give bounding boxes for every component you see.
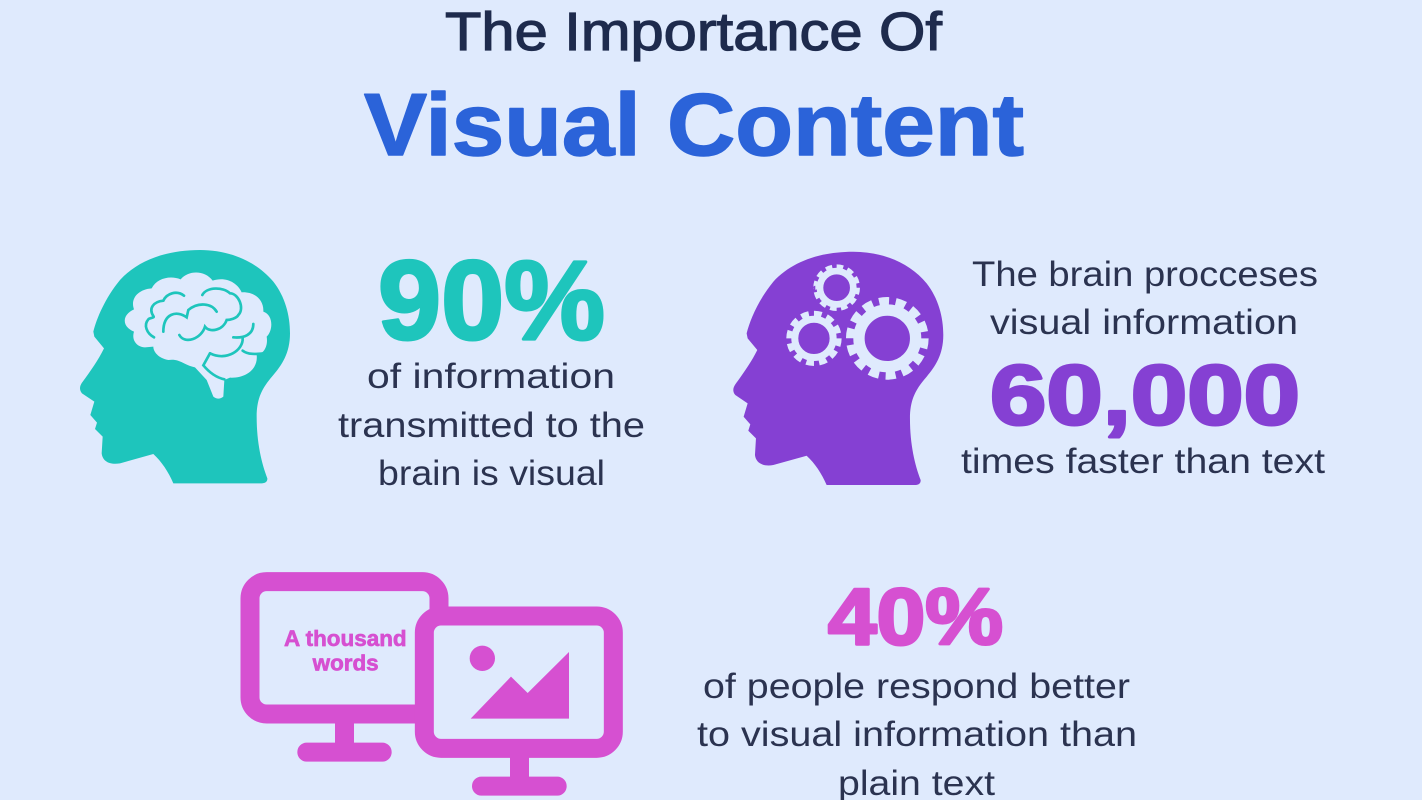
brain: [125, 272, 271, 399]
stat: 60,000: [961, 255, 1325, 481]
image glyph: [470, 646, 569, 719]
big number 60,000: 60,000: [990, 348, 1300, 442]
description line 3: brain is visual: [378, 454, 605, 493]
big number 40%: 40%: [828, 572, 1003, 661]
description line 1: of information: [367, 357, 615, 396]
right monitor: [424, 616, 613, 796]
title line 2: Visual Content: [364, 75, 1024, 174]
text line 2: visual information: [990, 303, 1298, 342]
left monitor label: A thousand: [284, 626, 407, 651]
stat: 40%: [697, 572, 1137, 800]
left monitor label line 2: words: [312, 650, 379, 675]
title: [364, 2, 1024, 174]
stat: 90%: [338, 238, 645, 493]
gears: [789, 266, 925, 376]
description line 2: transmitted to the: [338, 406, 645, 445]
title line 1: The Importance Of: [445, 2, 943, 62]
description line 2: to visual information than: [697, 715, 1137, 754]
description line 1: of people respond better: [703, 667, 1130, 706]
icon: teal head with brain: [80, 250, 290, 483]
text line 1: The brain procceses: [972, 255, 1318, 294]
icon: purple head with gears: [733, 252, 943, 485]
left monitor: [250, 582, 439, 762]
text line 3: times faster than text: [961, 442, 1325, 481]
big number 90%: 90%: [378, 238, 605, 363]
icon: two monitors: [250, 582, 613, 796]
